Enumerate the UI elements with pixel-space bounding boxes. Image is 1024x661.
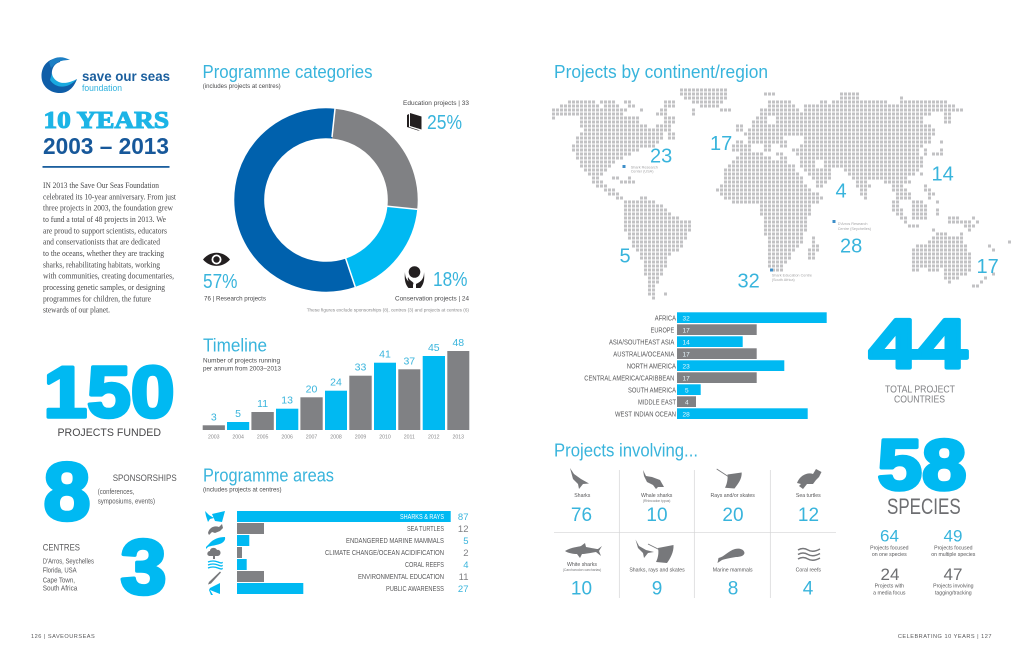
bar chart: programme areas: ENVIRONMENTAL EDUCATION xyxy=(358,574,444,581)
bar chart: projects per year: 37 xyxy=(403,355,415,367)
map values by region: 23 xyxy=(650,146,672,168)
bar chart: projects by region: 14 xyxy=(682,339,690,346)
stat: 3 centres: Florida, USA xyxy=(43,568,77,575)
heading: timeline: Timeline xyxy=(203,336,267,356)
bar chart: projects by region: ASIA/SOUTHEAST ASIA xyxy=(609,339,675,346)
bar chart: projects by region: SOUTH AMERICA xyxy=(628,387,676,394)
subheading xyxy=(203,357,281,373)
stat: 44 total project countries xyxy=(869,305,967,406)
bar chart: programme areas: SHARKS & RAYS xyxy=(400,514,444,521)
map values by region: 28 xyxy=(840,235,862,257)
subheading: per annum from 2003–2013 xyxy=(203,366,281,373)
bar chart: programme areas xyxy=(237,511,468,595)
logo: Save Our Seas Foundation xyxy=(42,57,170,93)
species breakdown: on multiple species xyxy=(931,552,976,558)
text block: introduction: to the oceans, whether they are tracking xyxy=(43,249,164,258)
bar chart: projects per year: 2006 xyxy=(281,435,293,441)
cell: sea turtles: Sea turtles xyxy=(796,493,821,499)
panel: programme categories xyxy=(202,62,469,314)
bar chart: projects per year: 2010 xyxy=(379,435,391,441)
bar chart: projects by region: 17 xyxy=(682,351,690,358)
text block: introduction: and conservationists that are dedicated xyxy=(43,238,160,247)
species breakdown: 24 xyxy=(881,565,899,584)
bar chart: projects per year: 5 xyxy=(235,408,241,420)
map callouts: centres: D'Arros Research xyxy=(838,222,868,226)
bar chart: programme areas: CORAL REEFS xyxy=(405,562,444,569)
bar chart: programme areas: 5 xyxy=(463,536,468,547)
bar chart: programme areas: SEA TURTLES xyxy=(407,526,444,533)
bar chart: projects per year: 45 xyxy=(428,342,440,354)
species breakdown: 49 xyxy=(944,527,962,546)
species breakdown: tagging/tracking xyxy=(935,590,972,596)
text block: introduction: to fund a total of 48 projects in 2013. We xyxy=(43,215,166,224)
bar chart: programme areas: ENDANGERED MARINE MAMMALS xyxy=(346,538,444,545)
stat: 3 centres: D'Arros, Seychelles xyxy=(43,558,94,565)
map callouts: centres: Shark Education Centre xyxy=(772,274,812,278)
cell: rays and skates xyxy=(710,469,755,526)
cell: marine mammals xyxy=(713,549,753,599)
bar chart: programme areas: CLIMATE CHANGE/OCEAN ACIDIFICATION xyxy=(325,550,444,557)
cell: whale sharks xyxy=(641,470,673,526)
footer: right page number: CELEBRATING 10 YEARS | 127 xyxy=(898,634,992,640)
bar chart: projects per year: 11 xyxy=(257,398,268,410)
bar chart: projects by region: NORTH AMERICA xyxy=(627,363,676,370)
map values by region: 14 xyxy=(932,164,954,186)
heading: 10 years: 10 YEARS xyxy=(44,108,169,134)
bar chart: projects by region: WEST INDIAN OCEAN xyxy=(615,411,676,418)
bar chart: projects by region: EUROPE xyxy=(651,327,675,334)
stat: 8 sponsorships xyxy=(44,446,177,538)
cell: sharks, rays and skates xyxy=(629,540,685,599)
icons: programme areas xyxy=(205,511,225,595)
heading: projects by continent/region: Projects by continent/region xyxy=(554,62,768,82)
stat: 44 total project countries: COUNTRIES xyxy=(894,394,945,406)
text block: introduction: programmes for children, the future xyxy=(43,294,151,303)
cell: whale sharks: Whale sharks xyxy=(641,493,673,499)
species breakdown: Projects focused xyxy=(934,545,973,551)
stat: 150 projects funded: 150 xyxy=(44,353,174,433)
icon: hands holding globe xyxy=(405,266,424,288)
cell: sharks, rays and skates: Sharks, rays and skates xyxy=(629,567,685,573)
bar chart: projects by region: 17 xyxy=(682,327,690,334)
bar chart: projects per year: 13 xyxy=(281,395,293,407)
cell: white sharks: 10 xyxy=(571,578,592,599)
bar chart: projects by region: 17 xyxy=(682,375,690,382)
map values by region: 5 xyxy=(620,246,631,268)
text block: introduction: three projects in 2003, the foundation grew xyxy=(43,204,173,213)
subheading: (includes projects at centres) xyxy=(203,83,281,90)
bar chart: projects by region: AFRICA xyxy=(655,315,676,322)
bar chart: projects per year: 2008 xyxy=(330,435,342,441)
bar chart: projects per year: 2003 xyxy=(208,435,220,441)
bar chart: projects per year: 20 xyxy=(306,383,317,395)
heading: 2003 – 2013: 2003 – 2013 xyxy=(43,133,169,159)
footer: left page number: 126 | SAVEOURSEAS xyxy=(31,634,95,640)
cell: coral reefs: 4 xyxy=(803,578,814,599)
cell: sharks, rays and skates: 9 xyxy=(652,578,662,599)
map callouts: centres: (South Africa) xyxy=(772,278,795,282)
bar chart: projects by region: MIDDLE EAST xyxy=(638,399,677,406)
rule xyxy=(42,166,170,168)
heading: projects involving: Projects involving... xyxy=(554,441,698,461)
bar chart: projects by region: AUSTRALIA/OCEANIA xyxy=(613,351,675,358)
cell: sharks: 76 xyxy=(571,505,592,526)
species breakdown: 47 xyxy=(944,565,962,584)
bar chart: projects per year xyxy=(203,337,469,441)
text block: introduction: sharks, rehabilitating habitats, working xyxy=(43,260,160,269)
subheading: (includes projects at centres) xyxy=(203,487,282,494)
bar chart: projects per year: 24 xyxy=(330,377,342,389)
bar chart: projects per year: 2007 xyxy=(306,435,317,441)
label: research: 76 | Research projects xyxy=(204,296,267,303)
cell: whale sharks: (Rhincodon typus) xyxy=(643,499,670,503)
stat: 44 total project countries: TOTAL PROJECT xyxy=(885,384,955,396)
bar chart: projects per year: 2011 xyxy=(404,435,415,441)
bar chart: projects per year: 33 xyxy=(355,362,366,374)
map values by region: 32 xyxy=(738,271,760,293)
bar chart: programme areas: 2 xyxy=(463,548,468,559)
text block: introduction: IN 2013 the Save Our Seas Foundation xyxy=(43,181,159,190)
bar chart: programme areas: 27 xyxy=(458,584,468,595)
panel: programme areas xyxy=(203,466,468,595)
panel: projects involving xyxy=(554,441,836,599)
stat: 44 total project countries: 44 xyxy=(869,305,967,383)
cell: whale sharks: 10 xyxy=(646,505,668,526)
bar chart: projects by region: CENTRAL AMERICA/CARIBBEAN xyxy=(584,375,674,382)
map callouts: centres: Shark Research xyxy=(631,165,658,169)
cell: coral reefs: Coral reefs xyxy=(796,567,821,573)
cell: white sharks: (Carcharodon carcharias) xyxy=(563,568,601,572)
bar chart: programme areas: 87 xyxy=(458,512,468,523)
bar chart: programme areas: 12 xyxy=(458,524,468,535)
stat: 3 centres: South Africa xyxy=(43,586,77,593)
bar chart: projects per year: 2005 xyxy=(257,435,268,441)
cell: coral reefs xyxy=(796,548,821,599)
map values by region: 17 xyxy=(976,256,999,278)
stat: 3 centres xyxy=(43,524,167,610)
text block: introduction: stewards of our planet. xyxy=(43,306,110,315)
icon: eye xyxy=(203,253,230,266)
species breakdown: on one species xyxy=(872,552,907,558)
bar chart: projects per year: 3 xyxy=(211,411,217,423)
label: conservation: Conservation projects | 24 xyxy=(395,296,469,303)
dotted world map xyxy=(552,90,1012,298)
stat: 3 centres: Cape Town, xyxy=(43,577,75,584)
icon: book xyxy=(407,113,422,130)
stat: 8 sponsorships: (conferences, xyxy=(98,489,134,496)
text block: introduction xyxy=(43,181,177,315)
bar chart: projects per year: 2009 xyxy=(355,435,366,441)
heading: programme areas: Programme areas xyxy=(203,466,334,486)
cell: white sharks: White sharks xyxy=(567,562,597,568)
bar chart: programme areas: PUBLIC AWARENESS xyxy=(386,586,444,593)
map values by region xyxy=(620,133,999,293)
text block: introduction: are proud to support scientists, educators xyxy=(43,226,167,235)
cell: sea turtles xyxy=(796,469,822,526)
value: 57%: 57% xyxy=(203,271,238,293)
bar chart: programme areas: 4 xyxy=(463,560,468,571)
bar chart: projects by region xyxy=(584,312,827,419)
map callouts: centres: Centre (Seychelles) xyxy=(838,227,872,231)
species breakdown: a media focus xyxy=(873,590,906,596)
bar chart: projects per year: 2013 xyxy=(453,435,464,441)
bar chart: projects per year: 2004 xyxy=(232,435,244,441)
species breakdown: Projects involving xyxy=(933,584,974,590)
icon: wave crescent xyxy=(42,57,77,93)
logo wordmark: save our seas xyxy=(82,69,170,84)
species breakdown: Projects focused xyxy=(870,545,909,551)
bar chart: projects per year: 2012 xyxy=(428,435,440,441)
stat: 58 species: 58 xyxy=(878,426,966,506)
map callouts: centres xyxy=(622,165,872,282)
bar chart: projects by region: 4 xyxy=(685,399,689,406)
stat: 58 species: SPECIES xyxy=(887,494,961,519)
bar chart: projects per year: 48 xyxy=(452,337,464,349)
cell: sea turtles: 12 xyxy=(798,505,819,526)
logo sub-wordmark: foundation xyxy=(82,83,122,93)
stat: 8 sponsorships: 8 xyxy=(44,446,90,538)
bar chart: programme areas: 11 xyxy=(459,572,468,583)
text block: introduction: with communities, creating documentaries, xyxy=(43,272,174,281)
value: 18%: 18% xyxy=(433,269,468,291)
value: 25%: 25% xyxy=(427,112,462,134)
heading: programme categories: Programme categories xyxy=(202,62,372,82)
cell: white sharks xyxy=(563,543,602,599)
footnote: These figures exclude sponsorships (8), centres (3) and projects at centres (6) xyxy=(307,308,469,314)
cell: marine mammals: Marine mammals xyxy=(713,567,753,573)
stat: 8 sponsorships: symposiums, events) xyxy=(98,498,155,505)
species breakdown: Projects with xyxy=(875,584,904,590)
bar chart: projects per year: 41 xyxy=(379,349,391,361)
cell: rays and skates: Rays and/or skates xyxy=(710,493,755,499)
cell: rays and skates: 20 xyxy=(722,505,744,526)
panel: timeline xyxy=(203,336,469,441)
map values by region: 17 xyxy=(710,133,732,155)
label: education: Education projects | 33 xyxy=(403,100,469,107)
stat: 150 projects funded: PROJECTS FUNDED xyxy=(58,427,161,439)
subheading: Number of projects running xyxy=(203,357,280,364)
bar chart: projects by region: 28 xyxy=(682,411,690,418)
species breakdown: 64 xyxy=(880,527,899,546)
text block: introduction: processing genetic samples, or designing xyxy=(43,283,165,292)
text block: introduction: celebrated its 10-year anniversary. From just xyxy=(43,192,177,201)
stat: 8 sponsorships: SPONSORSHIPS xyxy=(113,473,177,483)
cell: sharks xyxy=(570,468,592,526)
bar chart: projects by region: 23 xyxy=(682,363,690,370)
grid lines xyxy=(554,470,836,598)
stat: 3 centres: 3 xyxy=(120,524,166,610)
cell: marine mammals: 8 xyxy=(728,578,738,599)
bar chart: projects by region: 32 xyxy=(682,315,690,322)
map values by region: 4 xyxy=(836,181,847,203)
map callouts: centres: Center (USA) xyxy=(631,170,654,174)
stat: 3 centres: CENTRES xyxy=(43,543,80,553)
bar chart: projects by region: 5 xyxy=(685,387,689,394)
cell: sharks: Sharks xyxy=(574,493,591,499)
species breakdown xyxy=(870,527,976,596)
donut chart xyxy=(249,107,419,288)
